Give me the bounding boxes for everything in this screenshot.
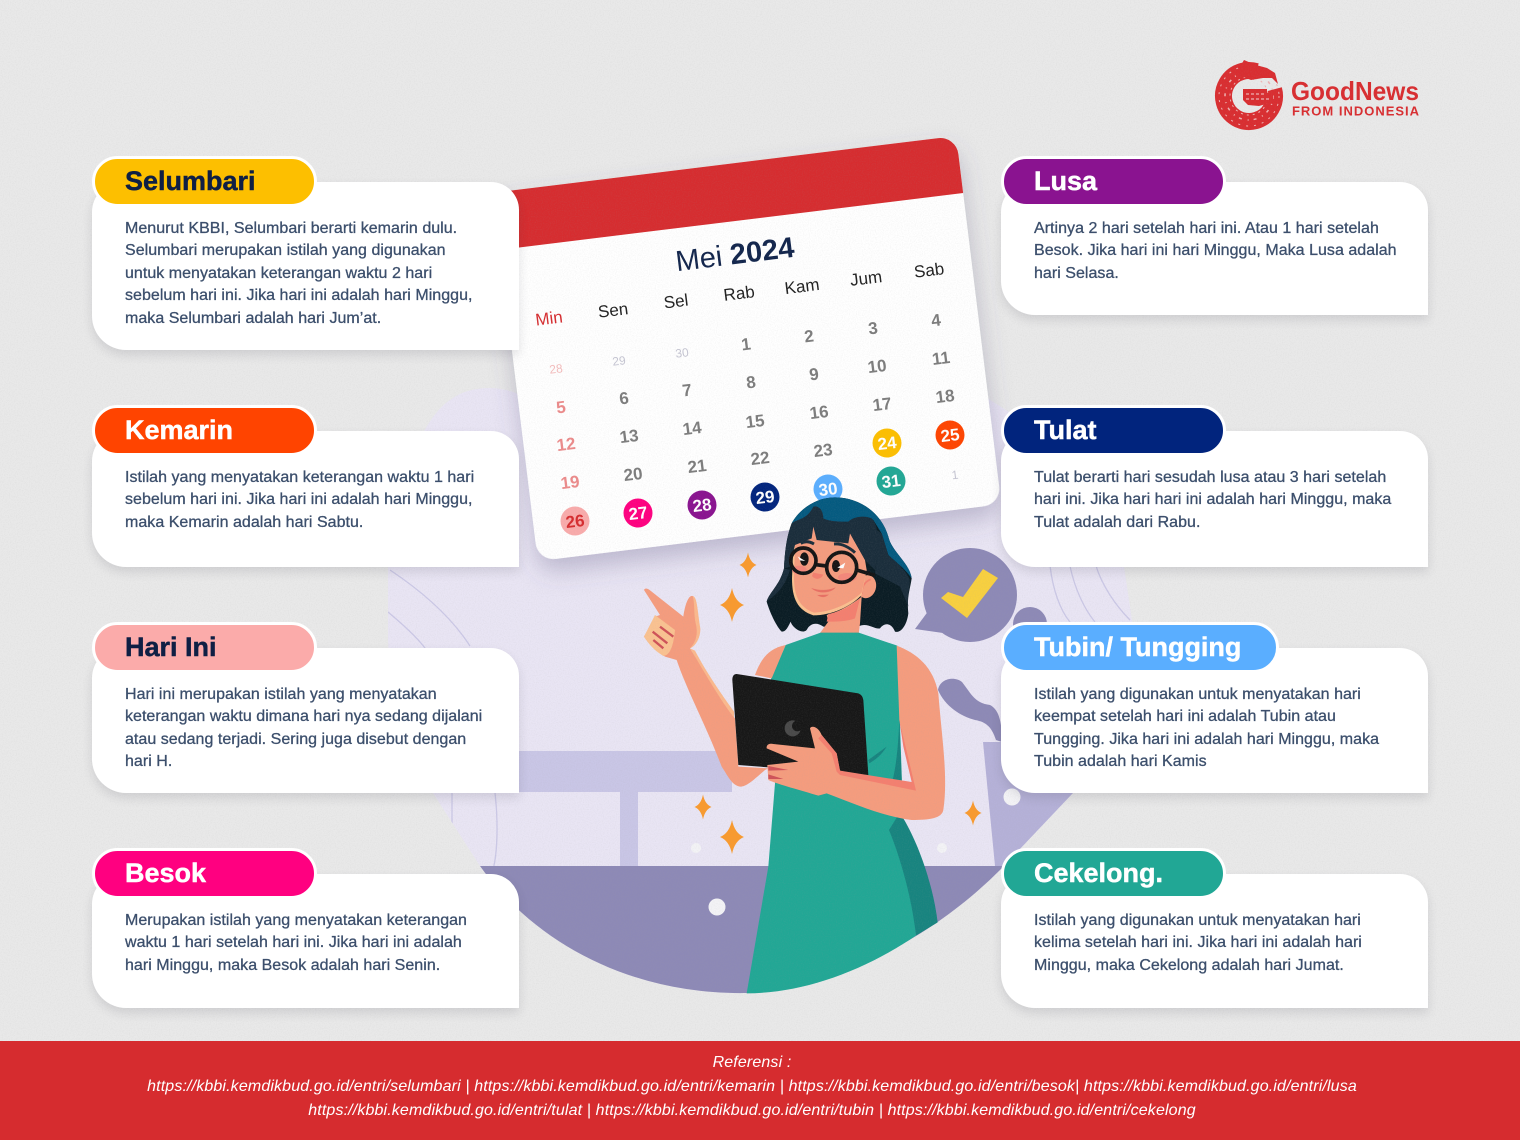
- text: Selumbari: Selumbari merupakan istilah yang digunakan: [125, 242, 446, 259]
- text: Tulat: [1034, 468, 1392, 531]
- text: Selumbari: sebelum hari ini. Jika hari ini adalah hari Minggu,: [125, 287, 472, 304]
- weekday headers: Jum: [849, 267, 883, 290]
- speech bubble with check mark: [915, 548, 1047, 642]
- date numbers: 17: [872, 394, 893, 415]
- logo: GoodNews from Indonesia: GoodNews: [1291, 76, 1419, 106]
- date numbers: 28: [549, 361, 564, 377]
- text: Kemarin: Istilah yang menyatakan keterangan waktu 1 hari: [125, 468, 474, 486]
- text: Hari Ini: hari H.: [125, 753, 172, 770]
- dress details: [868, 720, 902, 780]
- heading: Tulat: Tulat: [1034, 415, 1096, 445]
- logo: GoodNews from Indonesia: FROM INDONESIA: [1292, 104, 1420, 118]
- date numbers: 8: [745, 372, 757, 393]
- face: [792, 527, 867, 615]
- panel: Cekelong: [998, 848, 1430, 1016]
- date numbers: 9: [808, 364, 820, 385]
- date numbers: 3: [867, 318, 879, 339]
- weekday headers: Sab: [913, 259, 945, 282]
- highlighted dates: 26: [565, 511, 586, 532]
- cheeks: [792, 566, 807, 574]
- panel: Hari Ini: [90, 622, 522, 800]
- decorative dots: [691, 788, 1020, 916]
- text: Selumbari: untuk menyatakan keterangan waktu 2 hari: [125, 265, 432, 282]
- panel: Lusa: [998, 156, 1430, 322]
- panel: Kemarin: [90, 405, 521, 574]
- heading: Hari Ini: [92, 622, 317, 673]
- date numbers: 12: [556, 434, 577, 455]
- text: Hari Ini: atau sedang terjadi. Sering juga disebut dengan: [125, 731, 466, 748]
- text: Tubin / Tungging: Tungging. Jika hari ini adalah hari Minggu, maka: [1034, 731, 1379, 748]
- text: Hari Ini: Hari ini merupakan istilah yang menyatakan: [125, 686, 437, 702]
- text: Besok: hari Minggu, maka Besok adalah hari Senin.: [125, 957, 440, 974]
- text: Kemarin: [125, 468, 474, 531]
- date numbers: 16: [809, 402, 830, 423]
- left shoulder: [755, 645, 786, 678]
- text: Besok: [124, 912, 467, 974]
- date numbers: 13: [619, 426, 640, 447]
- neck: [819, 597, 862, 634]
- calendar sheet: [493, 136, 1001, 561]
- background blob scene: [388, 388, 1132, 994]
- right arm and hand: [767, 646, 945, 820]
- brows: [801, 542, 855, 553]
- text: Tulat: hari ini. Jika hari hari ini adalah hari Minggu, maka: [1034, 491, 1391, 508]
- pointing arm: [644, 588, 768, 787]
- tablet: [732, 674, 868, 775]
- ear: [855, 573, 879, 600]
- weekday headers: Min: [534, 307, 564, 330]
- logo: GoodNews from Indonesia: [1218, 60, 1420, 127]
- panel: Besok: [90, 848, 522, 1016]
- weekday headers: [534, 259, 945, 330]
- weekday headers: Sen: [597, 299, 629, 322]
- footer: references: https://kbbi.kemdikbud.go.id/entri/tulat | https://kbbi.kemdikbud.go.id/entri/tubin | https://kbbi.kemdikbud.go.id/entri/cekelong: [308, 1102, 1196, 1119]
- heading: Tubin/ Tungging: [1001, 622, 1279, 673]
- heading: Tubin/ Tungging: Tubin/ Tungging: [1034, 632, 1241, 662]
- icon: sparkles: [694, 552, 982, 854]
- head and hair: [767, 497, 912, 634]
- date numbers: 15: [745, 411, 766, 432]
- text: Hari Ini: [125, 686, 482, 770]
- text: Cekelong: Minggu, maka Cekelong adalah hari Jumat.: [1034, 957, 1344, 974]
- date numbers: 22: [750, 448, 771, 469]
- footer: references: https://kbbi.kemdikbud.go.id/entri/selumbari | https://kbbi.kemdikbud.go.id/entri/kemarin | https://kbbi.kemdikbud.go.id/entri/besok| https://kbbi.kemdikbud.go.id/entri/lusa: [147, 1078, 1357, 1095]
- date numbers: 29: [612, 353, 627, 369]
- highlighted dates: 30: [818, 479, 839, 500]
- weekday headers: Rab: [722, 282, 756, 305]
- plant behind figure: [938, 679, 1002, 742]
- eyes: [800, 552, 809, 566]
- text: Besok: waktu 1 hari setelah hari ini. Jika hari ini adalah: [125, 934, 462, 951]
- date numbers: 1: [740, 334, 752, 355]
- text: Besok: Merupakan istilah yang menyatakan keterangan: [125, 912, 467, 928]
- heading: Lusa: Lusa: [1034, 166, 1097, 196]
- heading: Cekelong.: Cekelong.: [1034, 858, 1163, 888]
- panel: Selumbari: [90, 156, 522, 358]
- text: Tubin / Tungging: Tubin adalah hari Kamis: [1034, 753, 1207, 770]
- date numbers: 14: [682, 418, 703, 439]
- text: Tulat: Tulat adalah dari Rabu.: [1034, 514, 1200, 531]
- text: Kemarin: sebelum hari ini. Jika hari ini adalah hari Minggu,: [125, 491, 472, 508]
- bangs: [784, 506, 878, 570]
- date numbers: 30: [675, 345, 690, 361]
- text: Cekelong: kelima setelah hari ini. Jika hari ini adalah hari: [1034, 934, 1362, 951]
- text: Kemarin: maka Kemarin adalah hari Sabtu.: [125, 514, 363, 531]
- date numbers: 4: [930, 310, 942, 331]
- heading: Selumbari: Selumbari: [125, 166, 256, 196]
- date numbers: 6: [618, 388, 630, 409]
- text: Selumbari: [125, 220, 472, 327]
- heading: Kemarin: [92, 405, 317, 456]
- weekday headers: Sel: [663, 291, 689, 312]
- text: Tubin / Tungging: Istilah yang digunakan untuk menyatakan hari: [1034, 686, 1361, 702]
- date numbers: 5: [555, 397, 567, 418]
- heading: Hari Ini: Hari Ini: [125, 632, 217, 662]
- date numbers: 23: [813, 440, 834, 461]
- footer: references: [0, 1041, 1520, 1140]
- panel: Tubin / Tungging: [998, 622, 1430, 800]
- dress: [747, 633, 916, 993]
- text: Cekelong: Istilah yang digunakan untuk menyatakan hari: [1034, 912, 1361, 928]
- text: Tubin / Tungging: [1034, 686, 1380, 770]
- date numbers: 21: [687, 456, 708, 477]
- date numbers: 11: [931, 348, 951, 369]
- text: Lusa: hari Selasa.: [1034, 265, 1119, 282]
- text: Selumbari: maka Selumbari adalah hari Jum’at.: [125, 310, 381, 327]
- nose and mouth: [812, 573, 823, 579]
- calendar: [493, 136, 1001, 561]
- weekday headers: Kam: [784, 275, 821, 298]
- calendar title: Mei 2024: [674, 232, 796, 278]
- date numbers: [549, 310, 959, 493]
- text: Cekelong: [1034, 912, 1362, 974]
- text: Tubin / Tungging: keempat setelah hari ini adalah Tubin atau: [1034, 708, 1336, 725]
- date numbers: 10: [867, 356, 888, 377]
- text: Lusa: Besok. Jika hari ini hari Minggu, Maka Lusa adalah: [1034, 242, 1397, 259]
- highlighted dates: [560, 420, 964, 536]
- footer: references: Referensi :: [713, 1054, 791, 1071]
- date numbers: 18: [935, 386, 956, 407]
- highlighted dates: 24: [877, 433, 898, 454]
- heading: Lusa: [1001, 156, 1226, 207]
- glasses: [791, 548, 875, 582]
- text: Lusa: [1034, 220, 1397, 282]
- date numbers: 2: [803, 326, 815, 347]
- panel: Tulat: [998, 405, 1430, 574]
- heading: Besok: [92, 848, 317, 899]
- date numbers: 1: [951, 468, 959, 482]
- text: Lusa: Artinya 2 hari setelah hari ini. Atau 1 hari setelah: [1034, 220, 1379, 236]
- heading: Besok: Besok: [125, 858, 206, 888]
- date numbers: 19: [560, 472, 581, 493]
- heading: Selumbari: [92, 156, 317, 207]
- highlighted dates: 27: [628, 503, 649, 524]
- highlighted dates: 25: [940, 425, 961, 446]
- heading: Cekelong.: [1001, 848, 1226, 899]
- heading: Tulat: [1001, 405, 1226, 456]
- text: Hari Ini: keterangan waktu dimana hari nya sedang dijalani: [125, 708, 482, 725]
- highlighted dates: 28: [692, 495, 713, 516]
- highlighted dates: 31: [881, 471, 902, 492]
- date numbers: 20: [623, 464, 644, 485]
- text: Selumbari: Menurut KBBI, Selumbari berarti kemarin dulu.: [125, 220, 457, 236]
- text: Tulat: Tulat berarti hari sesudah lusa atau 3 hari setelah: [1034, 468, 1386, 486]
- woman holding tablet: [644, 497, 945, 993]
- heading: Kemarin: Kemarin: [125, 415, 233, 445]
- date numbers: 7: [681, 380, 693, 401]
- highlighted dates: 29: [755, 487, 776, 508]
